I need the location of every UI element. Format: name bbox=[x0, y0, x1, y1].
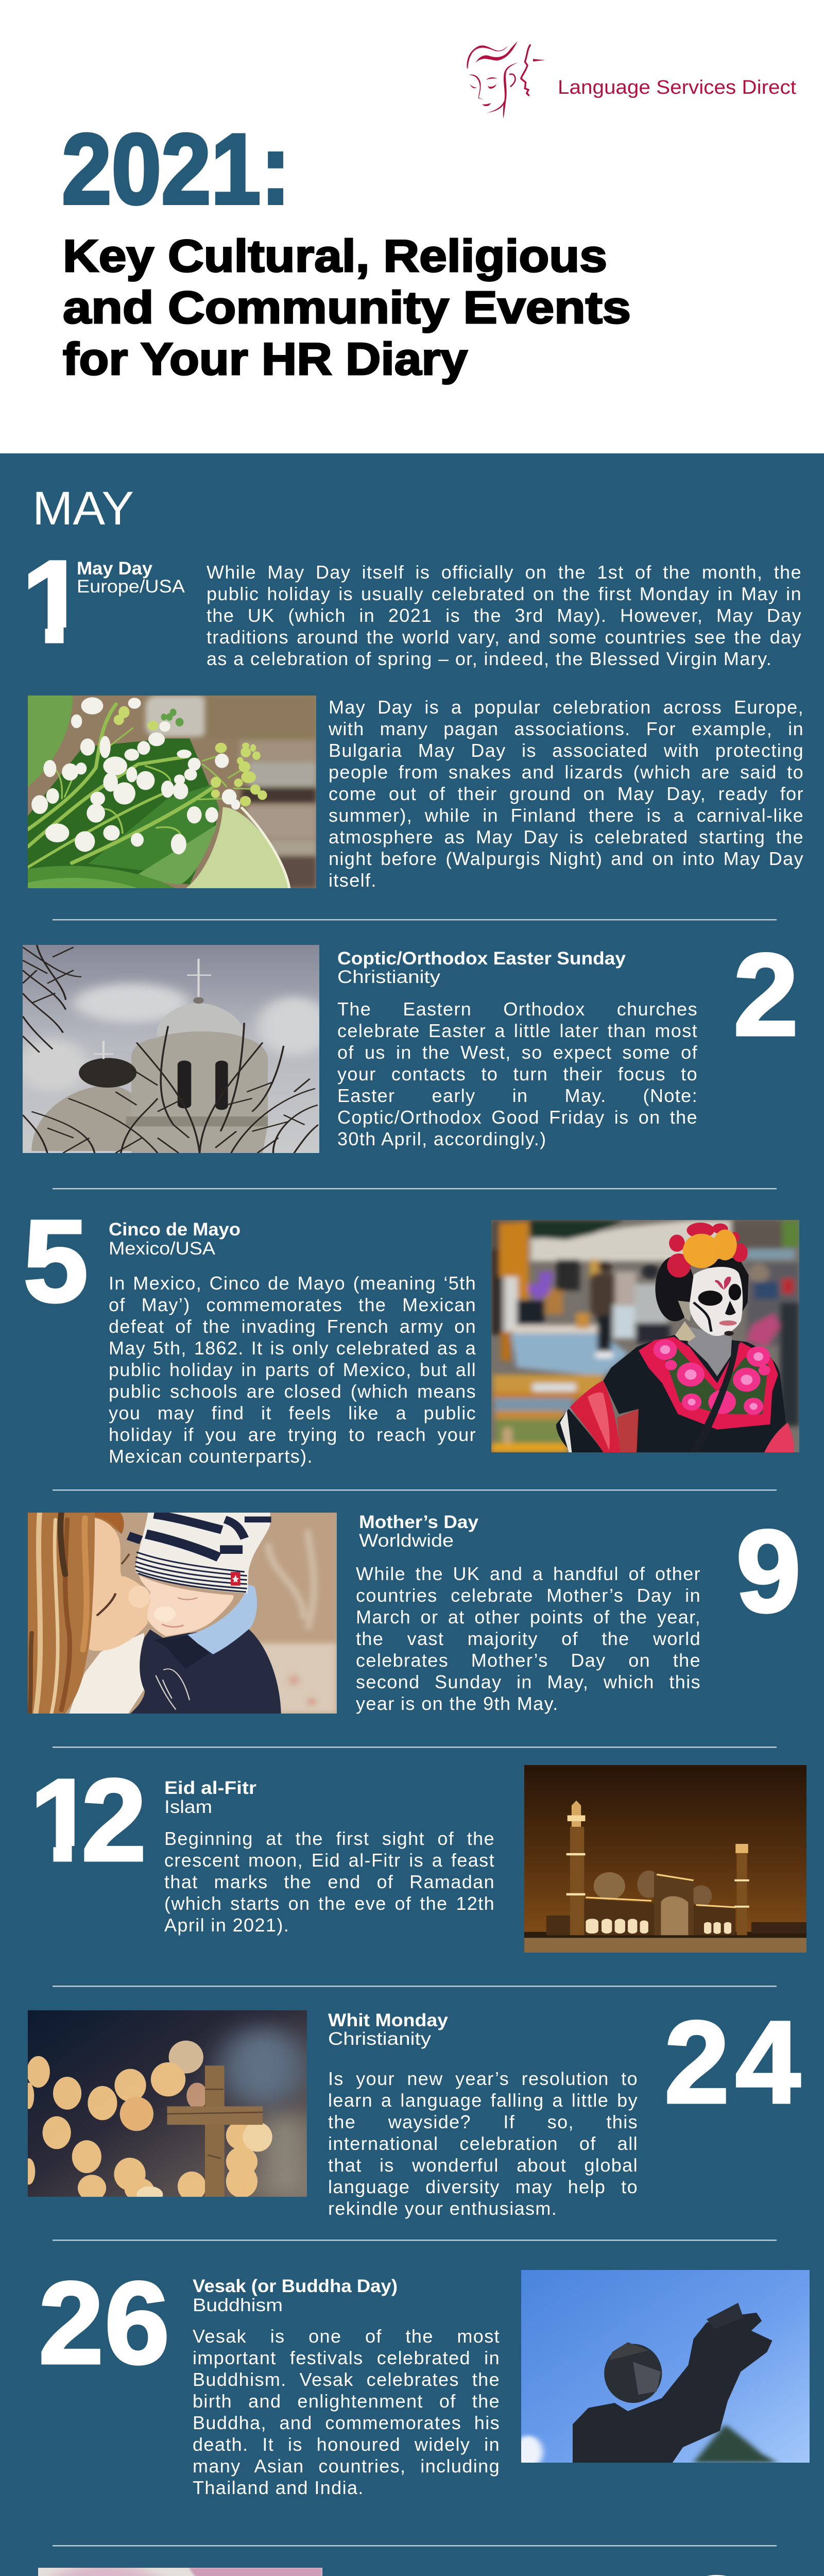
date number 26: 6 bbox=[105, 2258, 169, 2388]
date number 2: 2 bbox=[733, 930, 798, 1060]
event name: Eid al-Fitr bbox=[164, 1778, 256, 1798]
event region: Mexico/USA bbox=[109, 1239, 216, 1259]
body text: many Asian countries, including bbox=[193, 2455, 500, 2477]
logo wordmark: Language Services Direct bbox=[558, 77, 796, 98]
icon: logo face bbox=[467, 41, 545, 118]
detail text: come out of their ground on May Day, ready for bbox=[329, 783, 804, 804]
detail text: Bulgaria May Day is associated with protecting bbox=[329, 740, 804, 761]
body text bbox=[193, 2326, 500, 2503]
event region: Worldwide bbox=[359, 1531, 454, 1551]
body text: year is on the 9th May. bbox=[356, 1693, 559, 1714]
date number 24: 2 bbox=[664, 1997, 729, 2128]
panel: Spring Bank Holiday bbox=[26, 2553, 816, 2576]
body text: that is wonderful about global bbox=[328, 2155, 638, 2176]
body text: rekindle your enthusiasm. bbox=[328, 2198, 557, 2219]
body text: Mexican counterparts). bbox=[109, 1446, 313, 1467]
detail text: people from snakes and lizards (which are said to bbox=[329, 761, 804, 783]
panel: Vesak bbox=[39, 2258, 810, 2503]
photo: blossoming trees bbox=[38, 2568, 322, 2576]
header logo bbox=[467, 41, 796, 118]
photo: lily of the valley bbox=[28, 696, 316, 888]
panel: May Day bbox=[22, 537, 804, 894]
body text: May 5th, 1862. It is only celebrated as a bbox=[109, 1337, 476, 1359]
body text: Vesak is one of the most bbox=[193, 2326, 500, 2346]
body text: The Eastern Orthodox churches bbox=[337, 998, 698, 1019]
event name: Vesak (or Buddha Day) bbox=[193, 2276, 398, 2296]
photo: mother kissing baby bbox=[28, 1513, 337, 1714]
event name: Mother’s Day bbox=[359, 1512, 479, 1532]
date number 5: 5 bbox=[23, 1196, 88, 1327]
detail text: night before (Walpurgis Night) and on into May Day bbox=[329, 848, 804, 869]
body text: celebrate Easter a little later than most bbox=[337, 1020, 698, 1041]
intro text: public holiday is usually celebrated on the first Monday in May in bbox=[207, 583, 802, 604]
body text: countries celebrate Mother’s Day in bbox=[356, 1585, 701, 1606]
date number 31 bbox=[684, 2553, 816, 2576]
body text: In Mexico, Cinco de Mayo (meaning ‘5th bbox=[109, 1273, 476, 1293]
title line 2: and Community Events bbox=[63, 282, 631, 333]
body text: celebrates Mother’s Day on the bbox=[356, 1650, 701, 1671]
detail text: atmosphere as May Day is celebrated starting the bbox=[329, 826, 804, 848]
date number 26: 2 bbox=[39, 2258, 104, 2388]
body text: Easter early in May. (Note: bbox=[337, 1085, 698, 1106]
detail text: summer), while in Finland there is a carnival-like bbox=[329, 805, 804, 826]
body text bbox=[328, 2068, 638, 2223]
body text: you may find it feels like a public bbox=[109, 1402, 476, 1423]
body text: defeat of the invading French army on bbox=[109, 1316, 476, 1337]
body text bbox=[337, 998, 698, 1153]
detail text: with many pagan associations. For example, in bbox=[329, 718, 804, 739]
body text bbox=[109, 1273, 476, 1470]
body text: important festivals celebrated in bbox=[193, 2347, 500, 2368]
body text: Buddha, and commemorates his bbox=[193, 2412, 500, 2433]
panel: Coptic/Orthodox Easter Sunday bbox=[16, 930, 798, 1153]
panel: Whit Monday bbox=[23, 1997, 800, 2223]
event name: May Day bbox=[77, 558, 153, 579]
title line 1: Key Cultural, Religious bbox=[63, 230, 607, 281]
body text: language diversity may help to bbox=[328, 2176, 638, 2197]
detail text: May Day is a popular celebration across Europe, bbox=[329, 697, 804, 717]
body text: While the UK and a handful of other bbox=[356, 1563, 701, 1584]
title year: 2021: bbox=[62, 113, 290, 225]
event name: Coptic/Orthodox Easter Sunday bbox=[337, 948, 626, 969]
body text: March or at other points of the year, bbox=[356, 1606, 701, 1628]
photo: wooden cross with bokeh lights bbox=[28, 2010, 307, 2197]
title bbox=[62, 113, 631, 384]
panel: Mother's Day bbox=[28, 1506, 801, 1718]
body text: Coptic/Orthodox Good Friday is on the bbox=[337, 1107, 698, 1128]
body text: the wayside? If so, this bbox=[328, 2111, 638, 2132]
body text: of May’) commemorates the Mexican bbox=[109, 1294, 476, 1315]
intro text: as a celebration of spring – or, indeed, the Blessed Virgin Mary. bbox=[207, 648, 772, 669]
body text: Is your new year’s resolution to bbox=[328, 2068, 638, 2089]
intro text: While May Day itself is officially on the 1st of the month, the bbox=[207, 562, 802, 582]
body text: learn a language falling a little by bbox=[328, 2090, 638, 2111]
photo: Buddhist statue against blue sky bbox=[521, 2270, 810, 2463]
intro text: the UK (which in 2021 is the 3rd May). However, May Day bbox=[207, 605, 802, 626]
body text: death. It is honoured widely in bbox=[193, 2434, 500, 2455]
panel: Eid al-Fitr bbox=[30, 1755, 806, 1953]
body text: 30th April, accordingly.) bbox=[337, 1128, 547, 1149]
photo: orthodox church domes bbox=[23, 945, 319, 1153]
date number 12 bbox=[30, 1755, 146, 1886]
intro text: traditions around the world vary, and some countries see the day bbox=[207, 626, 802, 648]
photo: illuminated mosque at night bbox=[524, 1765, 806, 1953]
date number 9: 9 bbox=[736, 1506, 801, 1637]
intro text bbox=[207, 562, 802, 672]
body text: birth and enlightenment of the bbox=[193, 2391, 500, 2412]
body text: holiday if you are trying to reach your bbox=[109, 1424, 476, 1445]
event name: Cinco de Mayo bbox=[109, 1219, 241, 1240]
body text: second Sunday in May, which this bbox=[356, 1671, 701, 1692]
date number 12: 2 bbox=[81, 1755, 146, 1886]
event region: Christianity bbox=[337, 967, 441, 987]
body text: April in 2021). bbox=[164, 1914, 289, 1936]
event region: Buddhism bbox=[193, 2295, 283, 2315]
body text: public schools are closed (which means bbox=[109, 1381, 476, 1402]
body text: international celebration of all bbox=[328, 2133, 638, 2154]
event region: Islam bbox=[164, 1797, 212, 1817]
body text bbox=[356, 1563, 701, 1718]
panel: Cinco de Mayo bbox=[23, 1196, 799, 1470]
detail text bbox=[329, 697, 804, 894]
body text: your contacts to turn their focus to bbox=[337, 1063, 698, 1084]
date number 12: 1 bbox=[30, 1755, 95, 1886]
date number 24: 4 bbox=[735, 1997, 800, 2128]
body text: the vast majority of the world bbox=[356, 1628, 701, 1649]
body text: that marks the end of Ramadan bbox=[164, 1871, 495, 1892]
detail text: itself. bbox=[329, 870, 377, 891]
event name: Whit Monday bbox=[328, 2010, 449, 2030]
body text: Buddhism. Vesak celebrates the bbox=[193, 2369, 500, 2390]
photo: woman in Day of the Dead costume bbox=[491, 1220, 799, 1452]
body text: of us in the West, so expect some of bbox=[337, 1042, 698, 1063]
body text: crescent moon, Eid al-Fitr is a feast bbox=[164, 1850, 495, 1871]
body text: public holiday in parts of Mexico, but all bbox=[109, 1359, 476, 1380]
month heading: MAY bbox=[32, 482, 134, 535]
body text bbox=[164, 1828, 495, 1938]
body text: Thailand and India. bbox=[193, 2477, 364, 2498]
body text: Beginning at the first sight of the bbox=[164, 1828, 495, 1849]
event region: Europe/USA bbox=[77, 577, 185, 597]
event region: Christianity bbox=[328, 2029, 432, 2049]
body text: (which starts on the eve of the 12th bbox=[164, 1893, 495, 1914]
date number 1: 1 bbox=[22, 537, 87, 667]
title line 3: for Your HR Diary bbox=[63, 333, 468, 384]
